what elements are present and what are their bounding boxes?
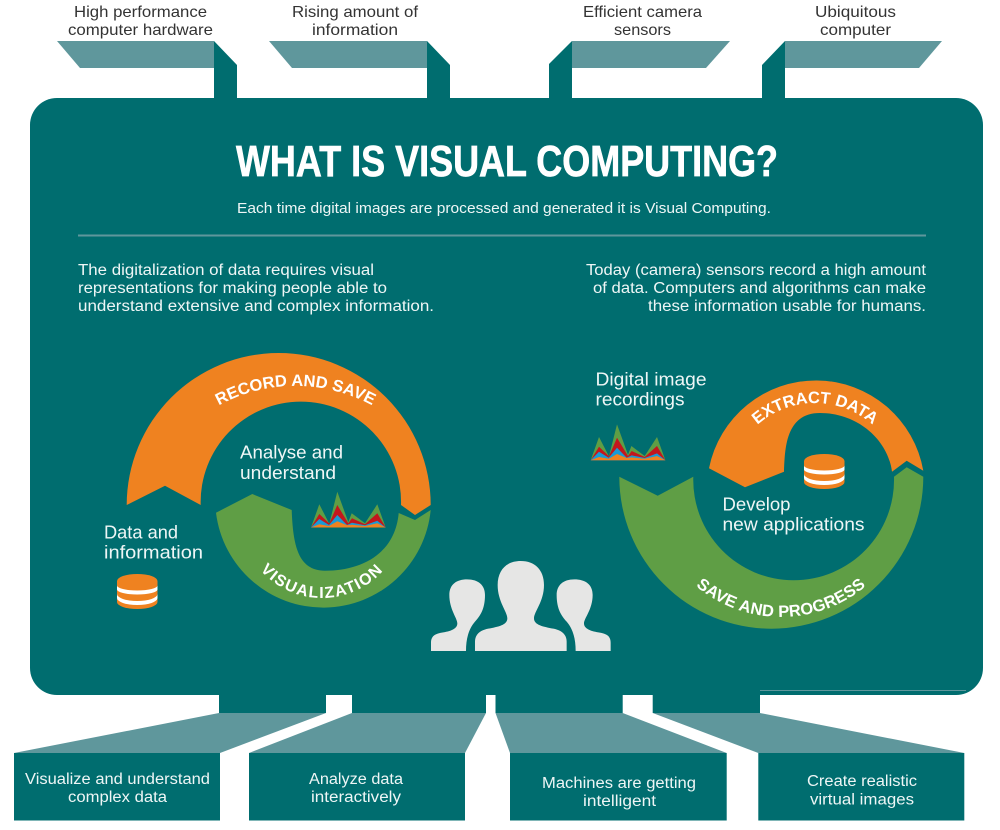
input: efficient camera sensors	[549, 4, 730, 99]
label: analyse and understand	[240, 443, 343, 483]
input: high performance computer hardware: computer hardware	[68, 22, 213, 39]
text block: left intro: The digitalization of data requires visual	[78, 262, 374, 279]
orange arc: record and save: RECORD AND SAVE	[214, 374, 376, 405]
output: analyze data interactively	[249, 694, 486, 820]
orange arc: record and save	[126, 353, 431, 515]
label: develop new applications: new applications	[722, 515, 864, 535]
input: rising amount of information: information	[312, 22, 398, 39]
output: create realistic virtual images: Create realistic	[807, 773, 917, 790]
text block: right intro	[586, 262, 927, 315]
icon: database	[117, 574, 158, 609]
label: develop new applications	[722, 495, 864, 535]
panel: main teal panel	[30, 98, 983, 695]
input: efficient camera sensors: sensors	[614, 22, 671, 39]
input: ubiquitous computer: computer	[820, 22, 892, 39]
output: visualize and understand complex data: Visualize and understand	[25, 771, 210, 788]
green arc: save and progress: SAVE AND PROGRESS	[697, 578, 864, 617]
output: analyze data interactively: interactively	[311, 789, 401, 806]
icon: area chart	[311, 492, 386, 528]
green arc: visualization: VISUALIZATION	[263, 562, 382, 598]
left cycle diagram	[104, 353, 431, 609]
bottom panel edge line	[760, 690, 966, 692]
output: create realistic virtual images: virtual images	[810, 792, 914, 808]
icon: area chart	[591, 424, 665, 460]
label: data and information	[104, 523, 203, 563]
input: efficient camera sensors: Efficient camera	[583, 4, 702, 21]
right cycle diagram	[590, 370, 924, 629]
output: machines are getting intelligent	[496, 694, 727, 820]
input: high performance computer hardware	[57, 4, 237, 99]
label: digital image recordings	[596, 370, 706, 410]
green arc: save and progress	[619, 467, 924, 629]
text block: left intro: understand extensive and complex information.	[78, 298, 434, 315]
output: analyze data interactively: Analyze data	[309, 771, 403, 788]
subtitle: Each time digital images are processed and generated it is Visual Computing.	[237, 201, 771, 217]
orange arc: extract data	[709, 380, 924, 488]
label: digital image recordings: recordings	[596, 390, 684, 410]
orange arc: extract data: EXTRACT DATA	[751, 392, 876, 424]
output: machines are getting intelligent: intelligent	[583, 793, 657, 810]
input: rising amount of information: Rising amount of	[292, 4, 419, 21]
input: rising amount of information	[269, 4, 450, 99]
text block: right intro: these information usable for humans.	[648, 298, 926, 315]
icon: database	[804, 454, 844, 489]
label: data and information: Data and	[104, 523, 178, 543]
text block: right intro: Today (camera) sensors record a high amount	[586, 262, 927, 279]
title: WHAT IS VISUAL COMPUTING?	[236, 137, 778, 186]
label: analyse and understand: Analyse and	[240, 443, 343, 463]
icon: group of people	[431, 561, 611, 651]
text block: right intro: of data. Computers and algorithms can make	[593, 280, 926, 297]
input: ubiquitous computer	[762, 4, 942, 99]
label: data and information: information	[104, 543, 203, 563]
label: develop new applications: Develop	[722, 495, 790, 515]
output: visualize and understand complex data: complex data	[68, 789, 167, 806]
label: analyse and understand: understand	[240, 463, 336, 483]
output: create realistic virtual images	[653, 694, 964, 820]
input: high performance computer hardware: High performance	[74, 4, 207, 21]
text block: left intro: representations for making people able to	[78, 280, 387, 297]
green arc: visualization	[216, 494, 431, 608]
label: digital image recordings: Digital image	[596, 370, 706, 390]
output: visualize and understand complex data	[14, 694, 326, 820]
text block: left intro	[78, 262, 434, 315]
output: machines are getting intelligent: Machines are getting	[542, 775, 696, 792]
input: ubiquitous computer: Ubiquitous	[815, 4, 896, 21]
